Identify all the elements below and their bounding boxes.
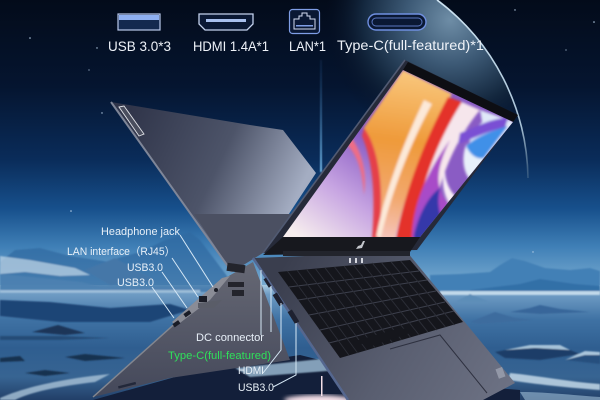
label: LAN: LAN*1 (289, 38, 326, 54)
background: night sky (0, 0, 600, 292)
port name labels (108, 37, 484, 54)
label: Type-C: Type-C(full-featured)*1 (337, 37, 484, 53)
right laptop: touchpad (390, 335, 487, 393)
left laptop: brand badge (119, 106, 144, 136)
label: headphone jack: Headphone jack (101, 226, 180, 238)
right laptop: palm rest badge (495, 367, 505, 379)
bottom platform and reflective bands (0, 355, 600, 400)
icon: Type-C port (368, 14, 426, 30)
left laptop: ports and hinge (172, 263, 245, 327)
right laptop: lid frame (263, 60, 518, 253)
left laptop: base (93, 262, 290, 397)
planet (76, 0, 528, 400)
label: LAN interface: LAN interface（RJ45） (67, 245, 175, 258)
stars (29, 9, 595, 253)
right laptop: bottom bezel with logo (263, 237, 420, 255)
right laptop: top bezel (403, 62, 518, 122)
connector callout labels (67, 226, 274, 394)
right laptop: wallpaper (280, 68, 515, 240)
label: HDMI: HDMI 1.4A*1 (193, 38, 269, 54)
mountains left (0, 232, 230, 376)
label: DC connector: DC connector (196, 332, 264, 344)
leader lines (152, 235, 296, 387)
left laptop: lid (111, 102, 316, 272)
label: Type-C full-featured: Type-C(full-featured) (168, 350, 271, 362)
icon: LAN port (290, 10, 320, 34)
label: USB3.0 lower: USB3.0 (117, 277, 154, 289)
mountains right (430, 258, 600, 364)
label: HDMI: HDMI (238, 365, 264, 377)
light beam (320, 60, 322, 172)
label: USB3.0 right: USB3.0 (238, 382, 274, 394)
icon: HDMI port (199, 14, 253, 30)
port icons row (118, 10, 426, 34)
icon: USB port (118, 14, 160, 30)
right laptop: lid edge (263, 60, 405, 253)
right laptop: side ports (264, 278, 299, 324)
right laptop: keyboard (278, 260, 463, 358)
background: icy ground (0, 285, 600, 400)
right laptop: base (253, 251, 515, 400)
label: USB3.0 upper: USB3.0 (127, 262, 163, 274)
label: USB: USB 3.0*3 (108, 38, 171, 54)
